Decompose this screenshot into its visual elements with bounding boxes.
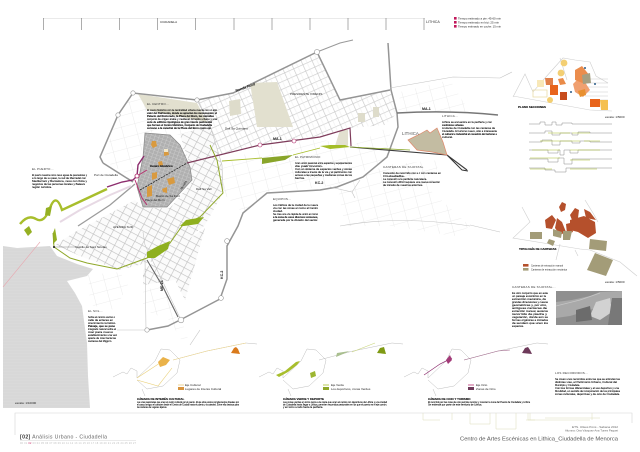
map labels: Centro Histórico <box>150 164 173 168</box>
text: equipos: a la zona de usos diversos comunes, <box>273 215 318 219</box>
text: canteras de s'hostal <box>383 165 441 187</box>
mini map: sports facilities route: Los deportivos, zonas Verdes <box>331 387 371 391</box>
text: equipos: vía con las zonas en torno al Centro <box>273 206 318 210</box>
text: el puerto: negocios de las personas locales y Balears <box>32 182 86 186</box>
sea <box>3 246 93 408</box>
text: equipos: Los tráficos de la ciudad de la nueva <box>273 203 318 207</box>
text: el sol: EL SOL... <box>88 309 103 313</box>
text: lithica: condiciones urbanas. <box>442 123 464 127</box>
mini map: sports facilities route <box>259 343 403 409</box>
text: el centro: valor del Patrimonio, donde se aprecian los monumentos, el <box>147 111 217 115</box>
text: el centro <box>147 102 217 130</box>
harbour routes <box>107 156 144 187</box>
text: equipos: generada por la división del sector. <box>273 218 318 222</box>
text: el puerto <box>32 167 88 189</box>
mini map: sports facilities route: Las zonas verdes en torno cerca a la costa que unen el centro con deportivos de Lithica y una ciudad <box>283 400 387 404</box>
text: el puerto: EL PUERTO... <box>32 167 54 171</box>
text: equipos: Se crea una vía rápida de unión en torno <box>273 212 318 216</box>
mini map: sports facilities route: y en torno a todo hacia la periferia. <box>283 405 323 409</box>
text: el patrimonio: Gran unión peatonal entre espacios y equipamientos <box>295 161 352 165</box>
central axis with pink road <box>187 128 351 163</box>
map labels: Dalt Sa Vall <box>196 187 212 191</box>
text: canteras de s'hostal detail: grandes dimensiones y cuevas <box>512 300 548 304</box>
plan: proposed quarry programme <box>513 58 625 119</box>
text: el centro: Palacio del Rectorado, la Plaza del Born, las murallas <box>147 114 214 118</box>
scale label: main plan: escala: 1/10000 <box>15 401 37 405</box>
legend: walking times: Tiempo estimado en coche: 15 min <box>458 24 501 28</box>
map labels: ME-24 <box>160 280 164 291</box>
mini map: cultural route: las canteras de Lugares lejanos. <box>137 405 167 409</box>
text: el sol: Paisaje, que se pone <box>88 324 115 328</box>
text: el sol: aparte de más hacia las <box>88 336 116 340</box>
text: el puerto: a lo largo de su paso, la red de Mercadal con <box>32 176 86 180</box>
plan: quarry typology: TIPOLOGÍA DE CANTERAS <box>519 246 557 251</box>
text: los recorridos: Movilidad, en sentido de incorporación de los principales <box>555 389 620 393</box>
map labels: KC-2 <box>315 181 323 185</box>
map labels: Muralla <box>179 180 188 190</box>
text: el sol: integrado natural sobre el <box>88 327 116 331</box>
map labels: AVENIDA SUR <box>113 225 134 229</box>
ring and main roads <box>100 52 390 163</box>
mini map: cultural route: Eje Cultural <box>185 383 201 387</box>
text: lithica: Ciutadella. El turismo nuevo, sitio e interesante <box>442 129 497 133</box>
urban fabric: centre-east <box>180 125 223 218</box>
text: lithica <box>442 114 497 139</box>
mini map: leisure route <box>404 343 548 406</box>
aerial photo of quarry <box>556 291 622 325</box>
text: canteras de s'hostal: Ciutadella. <box>383 174 405 178</box>
text: canteras de s'hostal detail: de sendero que unen los <box>512 321 549 325</box>
top distance scale <box>43 18 440 30</box>
top distance scale: CIUDADELA <box>160 20 177 24</box>
mini map: cultural route: CÁMARA DE INTERÉS CULTURAL <box>137 396 184 401</box>
footer project title: ETS. Ulises Pons - Sabana 2012 <box>572 425 619 429</box>
text: canteras de s'hostal: La conexión difícil requiere una nueva conexión <box>383 180 440 184</box>
text: el patrimonio <box>295 155 353 180</box>
footer project title: Centro de Artes Escénicas en Lithica_Ciudadella de Menorca <box>460 436 619 442</box>
text: los recorridos: distintas vías, el Patrimonio Urbano, Cultural del <box>555 380 617 384</box>
text: canteras de s'hostal detail: extracción manual, austeros <box>512 309 549 313</box>
footer frame with faded section drawing <box>15 413 632 435</box>
urban fabric: east <box>340 90 397 128</box>
legend: walking times: Tiempo estimado en bici: 25 min <box>458 20 499 24</box>
text: canteras de s'hostal detail: extracción mecánica, de <box>512 297 546 301</box>
beige open areas <box>138 94 207 122</box>
map labels: Ronda Nord <box>235 82 256 93</box>
map labels: Dalt Sa Quintana <box>225 126 248 130</box>
plan: quarry typology: escala: 1/5000 <box>605 280 625 284</box>
legend: walking times: Tiempo estimado a pie: 45-60 min <box>458 16 501 20</box>
text: el sol: Sobre el camino vecino o <box>88 315 115 319</box>
plan: quarry typology <box>513 200 637 284</box>
text: el sol: canteras del Migjorn. <box>88 339 112 343</box>
text: equipos <box>273 197 318 222</box>
main city plan <box>3 40 512 345</box>
map labels: MA-1 <box>273 137 282 141</box>
text: canteras de s'hostal detail: vegetación, donde aún se <box>512 315 548 319</box>
text: lithica: el cultural e industrial al conexión del turismo e <box>442 132 497 136</box>
text: canteras de s'hostal detail: recorrido de piedra y <box>512 312 548 316</box>
text: canteras de s'hostal detail: espacios. <box>512 324 524 328</box>
text: los recorridos: Con tres formas diferenciales y el uso deportivo y una <box>555 386 619 390</box>
map labels: LITHICA <box>402 131 419 136</box>
plan: proposed quarry programme: PLANO SECCIONES <box>518 105 546 109</box>
text: los recorridos: Municipio y Ciudadela. <box>555 383 580 387</box>
mini map: cultural route: Las vías peatonales que unen el centro cultural por el puerto. El eje sitúa varios complementos lineales por <box>137 400 239 404</box>
text: el centro: cercano a la catedral de la Plaza del Born como eje <box>147 126 211 130</box>
legend: quarries <box>523 264 567 272</box>
ferry line <box>3 242 40 287</box>
map labels: Port de Ciutadella <box>94 173 118 177</box>
mini map: leisure route: CÁMARA DE OCIO Y TURISMO <box>428 396 471 401</box>
text: canteras de s'hostal detail: antiguas canteras de <box>512 306 548 310</box>
text: lithica: cultural. <box>442 135 453 139</box>
text: canteras de s'hostal: de tránsito de nuestros entornos. <box>383 183 423 187</box>
text: canteras de s'hostal: La conexión a la periferia naturaleza. <box>383 177 427 181</box>
plan: proposed quarry programme: escala: 1/5000 <box>605 115 625 119</box>
legend: quarries: Canteras de extracción mecánica <box>531 268 567 272</box>
urban fabric: middle <box>223 125 392 213</box>
text: canteras de s'hostal detail: formas orgánicas e iniciados <box>512 318 549 322</box>
text: el centro: El casco histórico con la centralidad urbana cuenta con un alto <box>147 108 217 112</box>
footer project title: Alumna: Ona Vázquez Ana Tunes Paquet <box>565 428 618 432</box>
text: canteras de s'hostal detail: geométricas y, por otro, <box>512 303 547 307</box>
urban fabric: south <box>143 228 205 300</box>
top distance scale: LITHICA <box>426 20 440 24</box>
map labels <box>75 82 431 291</box>
text: el patrimonio: acceso a las pequeñas y medianas zonas de los <box>295 173 352 177</box>
text: el puerto: Mediterrani y Barcelona, nexo con Ibiza y <box>32 179 88 183</box>
mini map: cultural route <box>113 343 257 409</box>
green corridors <box>20 189 107 224</box>
urban fabric: north-east <box>180 52 350 163</box>
mini map: leisure route: El recorrido por las rutas de ocio permite recorrer y conocer la zona del Puerto de Ciudadela y Lithica <box>428 400 530 404</box>
text: equipos: EQUIPOS... <box>273 197 291 201</box>
urban fabric: east suburbs <box>390 77 498 190</box>
quarry section profiles <box>529 122 612 172</box>
text: el centro: EL CENTRO... <box>147 102 169 106</box>
legend: walking times <box>454 16 501 28</box>
map labels: Castillo de Sant Nicolau <box>75 245 107 249</box>
text: el patrimonio: EL PATRIMONIO <box>295 155 321 159</box>
footer title <box>20 434 137 445</box>
heritage buildings <box>147 141 175 197</box>
text: lithica: Lithica se encuentra en la periferia y con <box>442 120 492 124</box>
text: el sol <box>88 309 118 343</box>
text: lithica: LITHICA... <box>442 114 458 118</box>
mini map: cultural route: Lugares de Interés Cultural <box>185 387 222 391</box>
text: los recorridos <box>555 371 621 396</box>
text: el puerto: El puerto nuestra como nexo aguas de pescadores y <box>32 173 87 177</box>
text: canteras de s'hostal detail: Es otro conjunto que en este <box>512 291 548 295</box>
text: canteras de s'hostal detail <box>512 285 556 328</box>
text: el sol: calle de enlaces en <box>88 318 113 322</box>
historic centre <box>137 133 192 207</box>
text: el centro: serie de edificios tipológicos de gran interés patrimonial <box>147 120 212 124</box>
mini map: sports facilities route: de Ciutadella hasta llegar a Lithica, permiten recorridos peatonales en los que el puerto es el eje común. <box>283 402 387 406</box>
text: el patrimonio: de patrimonio. <box>295 164 323 168</box>
text: los recorridos: LOS RECORRIDOS... <box>555 371 588 375</box>
text: el centro: que forman el Centro Histórico, Conjunto de Ciudadella <box>147 123 212 127</box>
text: el sol: mar para nuevo <box>88 330 113 334</box>
mini map: sports facilities route: CÁMARA VERDE Y DEPORTE <box>283 396 324 401</box>
text: el patrimonio: barrios. <box>295 176 305 180</box>
urban fabric: south-west <box>55 182 223 270</box>
text: el centro: conjunto de origen árabe y medieval. El tejido urbano y una <box>147 117 217 121</box>
map labels: Bastió de Sa Font <box>156 194 180 198</box>
text: el sol: crecimiento turístico. <box>88 321 116 325</box>
text: el patrimonio: culturales a través de la via y el patrimonio con <box>295 170 352 174</box>
mini map: sports facilities route: Eje Verde <box>331 383 344 387</box>
mini map: cultural route: el casco antiguo el carácter desde el Centro de Ciudad hasta el puerto y la catedral. Entre ello destaca para <box>137 402 239 406</box>
text: el sol: establecimiento una vez <box>88 333 118 337</box>
text: lithica: Lindante de Ciutadella con las canteras de <box>442 126 495 130</box>
urban fabric: north-west <box>103 93 210 180</box>
mini map: leisure route: Eje Ocio <box>476 383 488 387</box>
text: canteras de s'hostal: CANTERAS DE S'HOSTAL <box>383 165 424 169</box>
text: el patrimonio: Con un sistema de espacios verdes y zonas <box>295 167 353 171</box>
text: el puerto: región turística. <box>32 185 52 189</box>
text: los recorridos: zonas culturales, deportivas y de ocio de Ciudadela. <box>555 392 620 396</box>
text: los recorridos: Se crean unos recorridos entre las que se articulan las <box>555 377 621 381</box>
footer project title <box>460 425 619 442</box>
footer title: [02] Análisis Urbano - Ciudadella <box>20 434 107 440</box>
map labels: MA-1 <box>422 107 431 111</box>
text: canteras de s'hostal: Conexión de recorrido con s.l. con canteras en <box>383 171 441 175</box>
text: canteras de s'hostal detail: un paisaje excéntrico en la <box>512 294 546 298</box>
legend: quarries: Canteras de extracción manual <box>531 264 563 268</box>
mini map: leisure route: Zonas de Ocio <box>476 387 496 391</box>
text: equipos: ciudad. <box>273 209 283 213</box>
text: canteras de s'hostal detail: CANTERAS DE S'HOSTAL... <box>512 285 556 289</box>
map labels: KC-2 <box>220 271 224 279</box>
mini map: leisure route: Se entiende por parte de este territorio de Lithica. <box>428 402 482 406</box>
map labels: PRESIDENTE XIMENIS <box>290 92 322 96</box>
footer title: 00 01 02 03 04 05 06 07 08 09 10 11 12 13 14 15 16 17 18 19 20 21 22 23 24 25 26 27 <box>20 442 137 445</box>
map labels: Plaça del Born <box>145 198 165 202</box>
Lithica settlement <box>408 128 447 155</box>
